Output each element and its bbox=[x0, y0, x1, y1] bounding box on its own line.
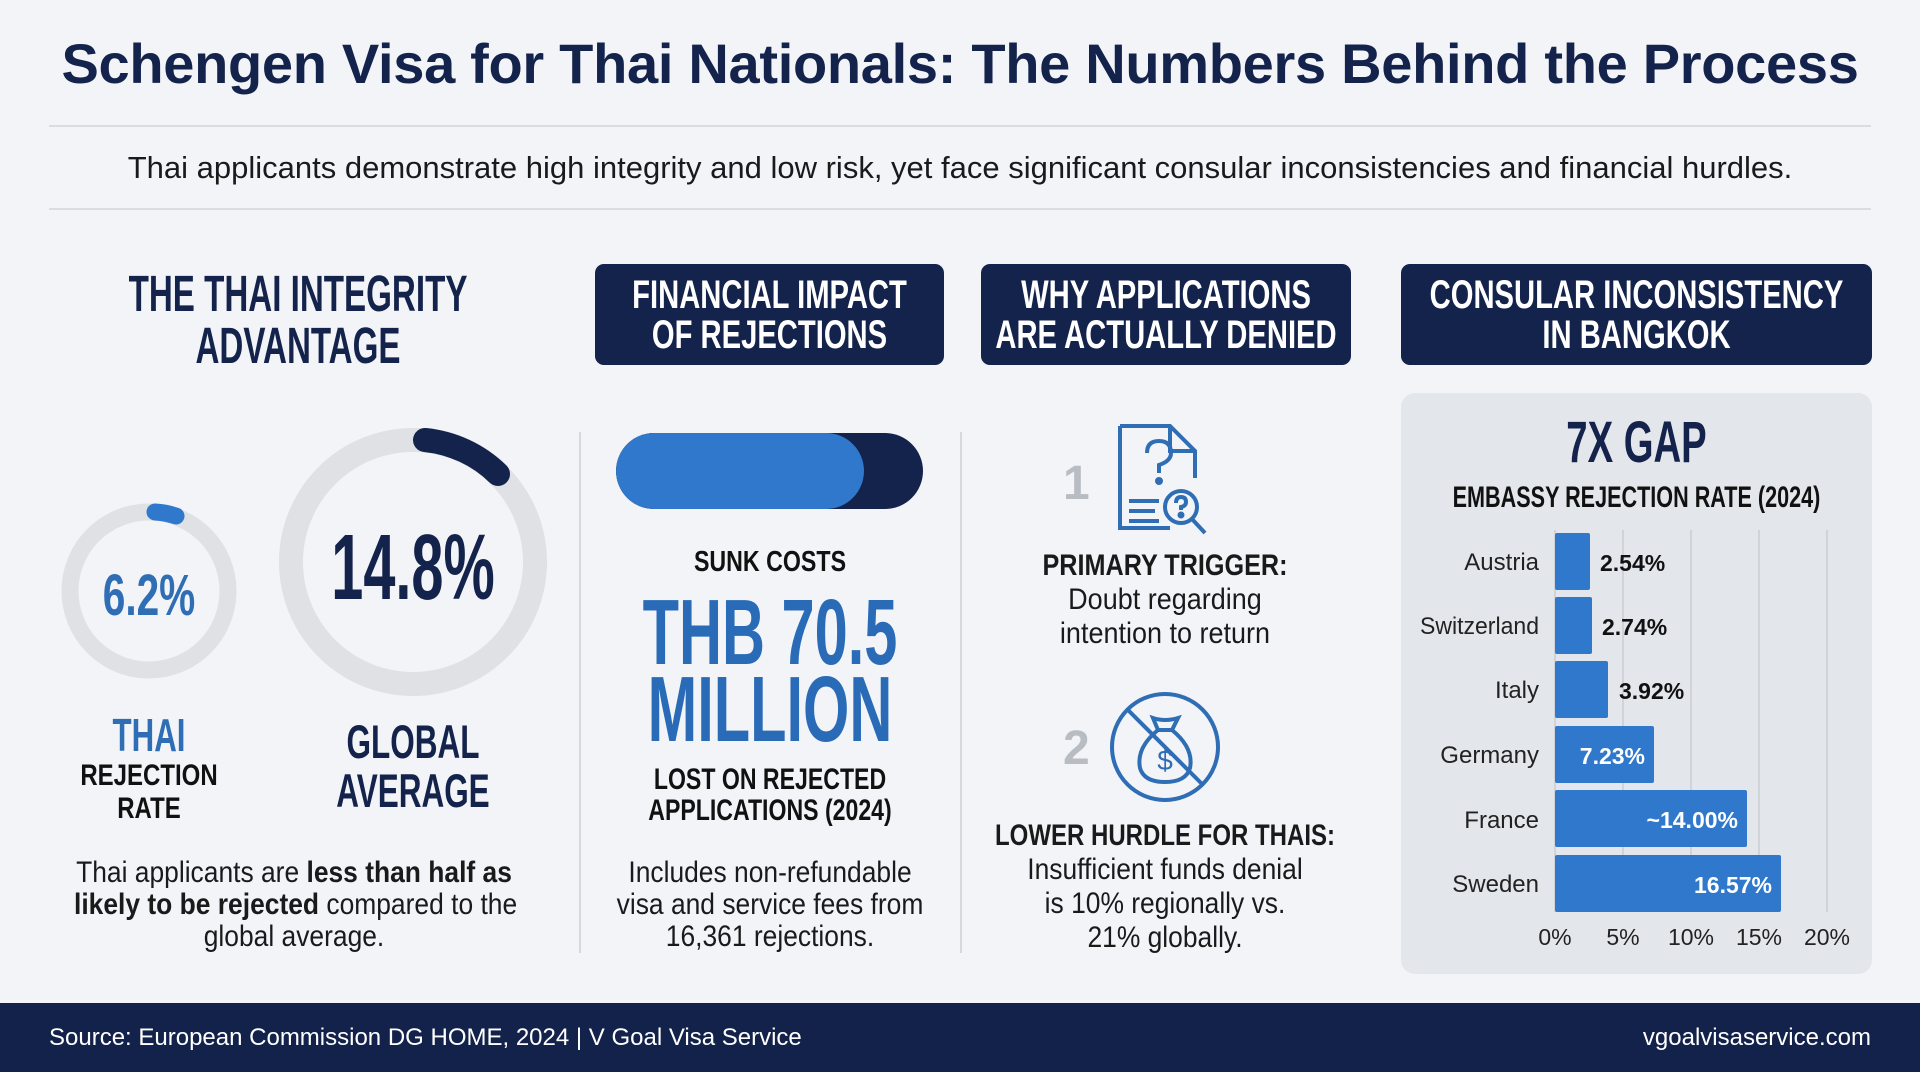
icon: no money bag: $ bbox=[1157, 745, 1173, 776]
heading: financial impact: FINANCIAL IMPACT bbox=[632, 273, 907, 317]
bar chart: 0% bbox=[1538, 924, 1572, 950]
bar chart: ~14.00% bbox=[1647, 807, 1738, 833]
title: Schengen Visa for Thai Nationals: The Numbers Behind the Process bbox=[61, 32, 1859, 95]
label: global average: GLOBAL bbox=[347, 715, 479, 768]
bar chart: Italy bbox=[1495, 677, 1539, 704]
heading: financial impact: OF REJECTIONS bbox=[652, 313, 887, 357]
stat: thb 70.5 million: THB 70.5 bbox=[643, 580, 897, 684]
text: primary trigger bbox=[1042, 549, 1288, 650]
text: lower hurdle: Insufficient funds denial bbox=[1027, 853, 1303, 886]
icon: no money bag bbox=[1110, 692, 1220, 802]
text: fees note bbox=[616, 856, 923, 953]
text: primary trigger: PRIMARY TRIGGER: bbox=[1042, 549, 1288, 582]
panel: integrity donuts bbox=[62, 428, 547, 953]
label: embassy rejection rate: EMBASSY REJECTION RATE (2024) bbox=[1453, 481, 1820, 514]
footer url: vgoalvisaservice.com bbox=[1643, 1024, 1871, 1051]
text: integrity note: Thai applicants are less than half as bbox=[76, 856, 512, 889]
label: thai rejection rate: REJECTION bbox=[80, 759, 218, 792]
stat: thb 70.5 million bbox=[643, 580, 897, 761]
footer source: Source: European Commission DG HOME, 2024 | V Goal Visa Service bbox=[49, 1024, 802, 1051]
bar chart: France bbox=[1464, 807, 1539, 834]
text: fees note: 16,361 rejections. bbox=[666, 920, 874, 953]
label: thai rejection rate: RATE bbox=[117, 792, 181, 825]
bar chart: 15% bbox=[1736, 924, 1782, 950]
panel: financial impact bbox=[616, 433, 923, 953]
text: lower hurdle: LOWER HURDLE FOR THAIS: bbox=[995, 819, 1335, 852]
heading: why denied: WHY APPLICATIONS bbox=[1021, 273, 1311, 317]
donut charts: 6.2% bbox=[103, 563, 195, 628]
panel: consular inconsistency chart bbox=[1401, 393, 1872, 974]
footer bbox=[0, 1003, 1920, 1072]
heading: why denied: ARE ACTUALLY DENIED bbox=[995, 313, 1337, 357]
bar chart: 2.54% bbox=[1600, 550, 1665, 576]
text: primary trigger: intention to return bbox=[1060, 617, 1270, 650]
bar chart: Sweden bbox=[1452, 871, 1539, 898]
bar chart: Austria bbox=[1464, 549, 1540, 576]
text: lower hurdle: 21% globally. bbox=[1087, 921, 1243, 954]
text: fees note: Includes non-refundable bbox=[628, 856, 912, 889]
heading: 7x gap: 7X GAP bbox=[1566, 410, 1707, 475]
bar chart: 3.92% bbox=[1619, 678, 1684, 704]
bar chart: Switzerland bbox=[1420, 613, 1539, 640]
bar chart: 2.74% bbox=[1602, 614, 1667, 640]
text: integrity note: global average. bbox=[204, 920, 384, 953]
heading: thai integrity advantage bbox=[129, 265, 467, 374]
bar chart: 10% bbox=[1668, 924, 1714, 950]
heading: consular inconsistency: CONSULAR INCONSISTENCY bbox=[1430, 273, 1843, 317]
text: integrity note: likely to be rejected compared to the bbox=[74, 888, 517, 921]
text: fees note: visa and service fees from bbox=[617, 888, 923, 921]
label: lost on rejected: LOST ON REJECTED bbox=[654, 763, 886, 796]
donut charts: 14.8% bbox=[331, 516, 495, 619]
subtitle: Thai applicants demonstrate high integrity and low risk, yet face significant consular inconsistencies and financial hurdles. bbox=[128, 150, 1792, 185]
bar chart: 5% bbox=[1606, 924, 1640, 950]
label: thai rejection rate: THAI bbox=[113, 709, 185, 761]
donut charts bbox=[62, 428, 547, 696]
text: lower hurdle: is 10% regionally vs. bbox=[1045, 887, 1285, 920]
stat: thb 70.5 million: MILLION bbox=[648, 657, 892, 761]
label: lost on rejected bbox=[648, 763, 892, 827]
label: global average bbox=[336, 715, 490, 817]
text: integrity note bbox=[74, 856, 517, 953]
panel: why denied bbox=[995, 424, 1335, 954]
text: primary trigger: Doubt regarding bbox=[1068, 583, 1262, 616]
heading: consular inconsistency bbox=[1401, 264, 1872, 365]
heading: why denied bbox=[981, 264, 1351, 365]
heading: financial impact bbox=[595, 264, 944, 365]
pill bar bbox=[616, 433, 923, 509]
label: global average: AVERAGE bbox=[336, 764, 490, 817]
heading: thai integrity advantage: THE THAI INTEGRITY bbox=[129, 265, 467, 322]
label: thai rejection rate bbox=[80, 709, 218, 825]
bar chart: 7.23% bbox=[1580, 743, 1645, 769]
number 2: 2 bbox=[1063, 722, 1090, 775]
heading: thai integrity advantage: ADVANTAGE bbox=[195, 317, 401, 374]
bar chart bbox=[1420, 530, 1850, 950]
bar chart: 20% bbox=[1804, 924, 1850, 950]
label: lost on rejected: APPLICATIONS (2024) bbox=[648, 794, 892, 827]
number 1: 1 bbox=[1063, 457, 1090, 510]
label: sunk costs: SUNK COSTS bbox=[694, 546, 846, 578]
heading: consular inconsistency: IN BANGKOK bbox=[1542, 313, 1731, 357]
bar chart: 16.57% bbox=[1694, 872, 1772, 898]
icon: document question bbox=[1118, 424, 1206, 534]
text: lower hurdle bbox=[995, 819, 1335, 954]
bar chart: Germany bbox=[1440, 742, 1539, 769]
